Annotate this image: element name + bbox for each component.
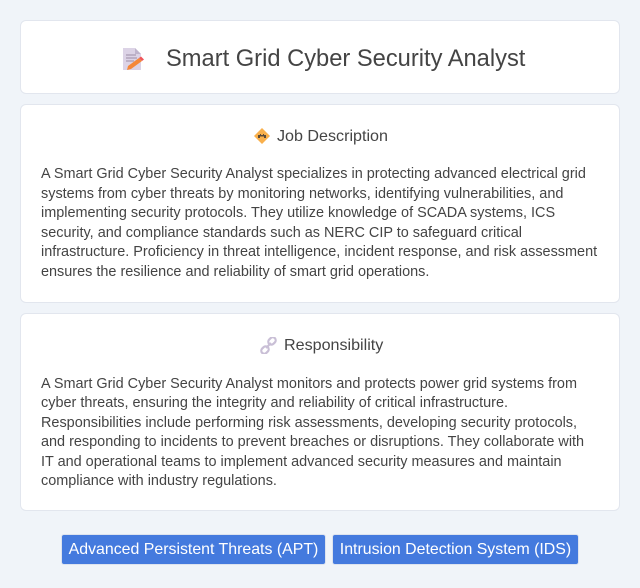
text block: responsibility: compliance with industry regulations.	[41, 473, 277, 489]
tag: advanced persistent threats	[61, 534, 326, 565]
text block: job description: A Smart Grid Cyber Security Analyst specializes in protecting advanced electrical grid	[41, 166, 586, 182]
text block: job description: ensures the resilience and reliability of smart grid operations.	[41, 264, 429, 280]
icon: chain link	[260, 337, 277, 354]
tag: advanced persistent threats: Advanced Persistent Threats (APT)	[69, 541, 318, 558]
icon: document with pencil	[123, 48, 144, 70]
tag: intrusion detection system: Intrusion Detection System (IDS)	[340, 541, 571, 558]
text block: responsibility: and responding to incidents to prevent breaches or disruptions. They collaborate with	[41, 434, 584, 450]
text block: responsibility: A Smart Grid Cyber Security Analyst monitors and protects power grid systems from	[41, 376, 577, 392]
text block: responsibility: IT and operational teams to implement advanced security measures and maintain	[41, 454, 562, 470]
text block: job description: systems from cyber threats by monitoring networks, identifying vulnerabilities, and	[41, 186, 563, 202]
panel: responsibility	[20, 313, 620, 511]
panel: job description	[20, 104, 620, 303]
text block: responsibility: Responsibilities include performing risk assessments, developing security protocols,	[41, 415, 577, 431]
heading: responsibility: Responsibility	[284, 336, 383, 354]
panel: title card	[20, 20, 620, 94]
text block: job description: security, and compliance standards such as NERC CIP to safeguard critical	[41, 225, 522, 241]
text block: job description: implementing security protocols. They utilize knowledge of SCADA systems, ICS	[41, 205, 555, 221]
tag: intrusion detection system	[332, 534, 579, 565]
heading: job description: Job Description	[277, 127, 388, 145]
text block: job description: infrastructure. Proficiency in threat intelligence, incident response, and risk assessment	[41, 244, 597, 260]
text block: responsibility	[41, 376, 584, 489]
text block: responsibility: cyber threats, ensuring the integrity and reliability of critical infrastructure.	[41, 395, 508, 411]
text block: job description	[41, 166, 598, 280]
icon: job description diamond	[254, 128, 270, 144]
title: Smart Grid Cyber Security Analyst	[166, 46, 525, 72]
